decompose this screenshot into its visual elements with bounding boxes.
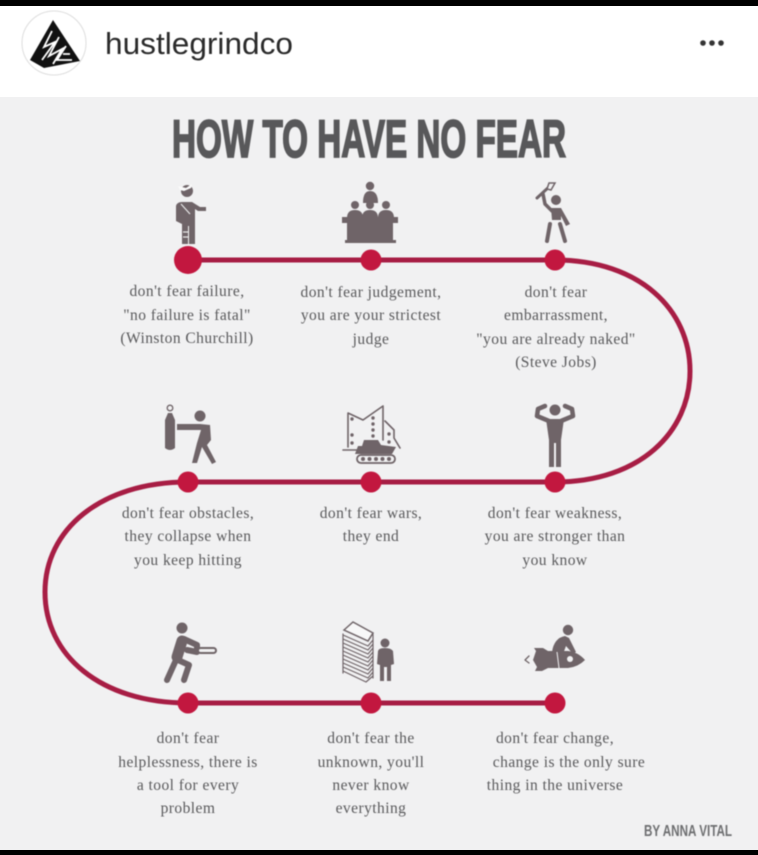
text: change: thing in the universe	[487, 777, 623, 794]
profile header bar	[0, 6, 758, 97]
text: obstacles: don't fear obstacles,	[122, 505, 254, 522]
icon: strong man flexing	[537, 404, 573, 467]
icon: naked man waving torch	[537, 183, 570, 241]
text: failure: (Winston Churchill)	[120, 330, 254, 347]
text: unknown: never know	[332, 777, 410, 794]
text: unknown: don't fear the	[327, 730, 415, 747]
text: weakness: you are stronger than	[485, 528, 625, 545]
text: change: don't fear change,	[496, 730, 614, 747]
text: failure: don't fear failure,	[129, 283, 245, 300]
text: judgement: you are your strictest	[301, 307, 441, 324]
text: judgement: judge	[352, 331, 389, 348]
text: helplessness: a tool for every	[137, 777, 239, 794]
text: judgement: don't fear judgement,	[301, 284, 441, 301]
icon: profile logo	[22, 11, 86, 75]
winding timeline path	[45, 260, 690, 703]
timeline nodes	[174, 246, 566, 714]
icon: man punching bag	[165, 405, 216, 464]
icon: man riding rocket	[525, 625, 585, 671]
text: failure: "no failure is fatal"	[123, 307, 251, 324]
text: embarrassment: embarrassment,	[504, 307, 608, 324]
text: embarrassment: (Steve Jobs)	[515, 354, 597, 371]
text: unknown: unknown, you'll	[318, 754, 424, 771]
text: weakness: don't fear weakness,	[488, 505, 622, 522]
text: obstacles: you keep hitting	[134, 552, 242, 569]
text: weakness: you know	[522, 552, 588, 569]
text: obstacles: they collapse when	[125, 528, 251, 545]
icon: tank and ruined building	[343, 406, 400, 463]
text: embarrassment: "you are already naked"	[476, 331, 636, 348]
icon: judge and jury at bench	[342, 182, 398, 243]
text: embarrassment: don't fear	[525, 284, 588, 301]
text: helplessness: don't fear	[157, 730, 220, 747]
text: wars: they end	[343, 528, 399, 545]
icon: tall stack of books and person	[343, 622, 394, 682]
text: change: change is the only sure	[493, 754, 645, 771]
icon: man with chainsaw	[167, 622, 216, 680]
text: helplessness: problem	[161, 800, 215, 817]
icon: bandaged man	[176, 184, 206, 244]
text: wars: don't fear wars,	[320, 505, 422, 522]
text: helplessness: helplessness, there is	[118, 754, 258, 771]
account name: hustlegrindco	[105, 26, 293, 61]
text: unknown: everything	[336, 800, 406, 817]
icon: more menu dots	[700, 40, 724, 46]
